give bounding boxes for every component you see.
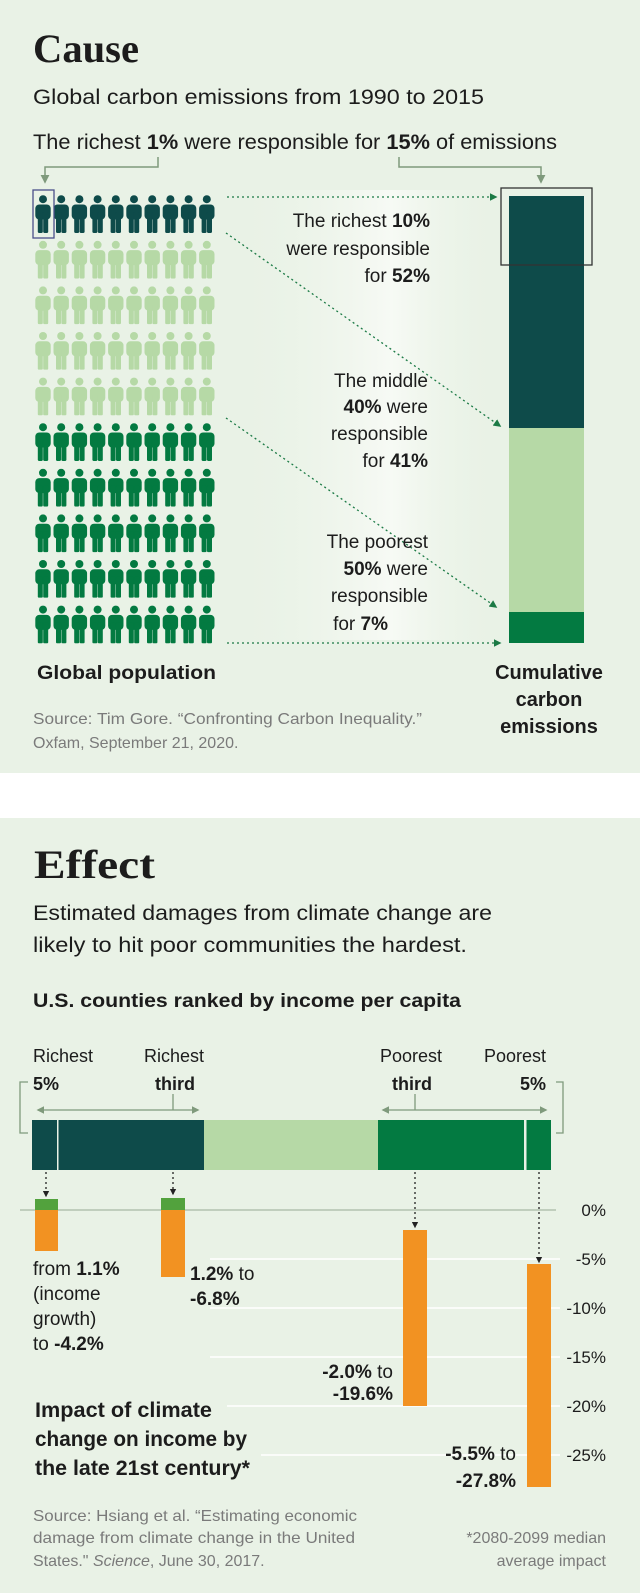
impact bars — [35, 1198, 551, 1487]
axis labels: 0% — [581, 1201, 606, 1220]
group labels: 5% — [520, 1074, 546, 1094]
group labels: 5% — [33, 1074, 59, 1094]
source: Oxfam: Oxfam, September 21, 2020. — [33, 735, 238, 752]
value labels: (income — [33, 1284, 101, 1305]
brackets and range arrows — [20, 1082, 563, 1133]
chart caption: change on income by — [35, 1428, 247, 1451]
label: cumulative carbon emissions: Cumulative — [495, 662, 603, 684]
panel: effect: -5.5% to — [445, 1444, 516, 1465]
axis labels: -5% — [576, 1250, 606, 1269]
panel: effect: -6.8% — [190, 1289, 240, 1310]
value labels: to -4.2% — [33, 1334, 104, 1355]
label: cumulative carbon emissions: carbon — [516, 689, 582, 711]
source: Hsiang: damage from climate change in the United — [33, 1530, 355, 1547]
dotted arrows to impact bars — [46, 1172, 539, 1262]
source: Oxfam: Source: Tim Gore. “Confronting Carbon Inequality.” — [33, 711, 422, 728]
gridlines — [210, 1259, 560, 1455]
highlight box: top 15% — [501, 188, 592, 265]
group labels: Poorest — [380, 1046, 442, 1066]
source: Hsiang: Source: Hsiang et al. “Estimating economic — [33, 1508, 357, 1525]
axis labels: -25% — [566, 1446, 606, 1465]
chart caption: Impact of climate — [35, 1399, 212, 1422]
arrows: dotted connectors — [226, 197, 500, 643]
arrow: 1% bracket to figure — [45, 157, 158, 182]
callout: richest 1%: The richest 1% were responsible for 15% of emissions — [33, 131, 557, 154]
text: poorest 50%: 50% were — [344, 559, 428, 580]
label: cumulative carbon emissions: emissions — [500, 716, 598, 738]
group labels: third — [155, 1074, 195, 1094]
footnote: average impact — [497, 1553, 607, 1570]
arrow: 15% bracket to bar — [399, 157, 541, 182]
chart heading: U.S. counties ranked by income per capita — [33, 991, 461, 1012]
text: poorest 50%: The poorest — [327, 532, 429, 553]
label: global population: Global population — [37, 663, 216, 684]
value labels: from 1.1% — [33, 1259, 120, 1280]
group labels: Poorest — [484, 1046, 546, 1066]
axis labels — [566, 1201, 606, 1465]
row: richest 10% — [35, 195, 214, 233]
text: middle 40%: The middle — [334, 371, 428, 392]
text: richest 10%: for 52% — [365, 266, 430, 287]
text: poorest 50%: for 7% — [333, 614, 388, 635]
value labels: growth) — [33, 1309, 96, 1330]
highlight box: richest 1% — [33, 190, 54, 238]
panel: effect: 1.2% to — [190, 1264, 254, 1285]
text: middle 40%: 40% were — [344, 397, 428, 418]
axis labels: -15% — [566, 1348, 606, 1367]
chart caption: the late 21st century* — [35, 1457, 251, 1480]
text: middle 40%: for 41% — [363, 451, 428, 472]
footnote: *2080-2099 median — [466, 1530, 606, 1547]
text: richest 10%: The richest 10% — [293, 211, 430, 232]
rows: poorest 50% — [35, 423, 214, 643]
group labels: third — [392, 1074, 432, 1094]
axis labels: -10% — [566, 1299, 606, 1318]
text: middle 40%: responsible — [331, 424, 428, 445]
subtitle: Estimated damages from climate change are — [33, 902, 492, 925]
stacked bar: cumulative emissions — [501, 188, 592, 643]
text: poorest 50%: responsible — [331, 586, 428, 607]
group labels: Richest — [144, 1046, 204, 1066]
subtitle: likely to hit poor communities the hardest. — [33, 934, 467, 957]
source: Hsiang: States." Science, June 30, 2017. — [33, 1553, 265, 1570]
panel: effect — [0, 818, 640, 1593]
panel: cause — [0, 0, 640, 773]
panel: effect: -2.0% to — [322, 1362, 393, 1383]
panel: effect: -27.8% — [456, 1471, 516, 1492]
rows: middle 40% — [35, 241, 214, 415]
people grid: global population — [33, 190, 214, 643]
group labels — [33, 1046, 546, 1094]
panel: effect: -19.6% — [333, 1384, 393, 1405]
heading: Effect: Effect — [34, 842, 156, 887]
heading: Cause: Cause — [33, 26, 139, 71]
bar: counties by income — [32, 1120, 551, 1170]
subtitle: Global carbon emissions from 1990 to 2015 — [33, 86, 484, 109]
text: richest 10%: were responsible — [285, 239, 430, 260]
group labels: Richest — [33, 1046, 93, 1066]
axis labels: -20% — [566, 1397, 606, 1416]
